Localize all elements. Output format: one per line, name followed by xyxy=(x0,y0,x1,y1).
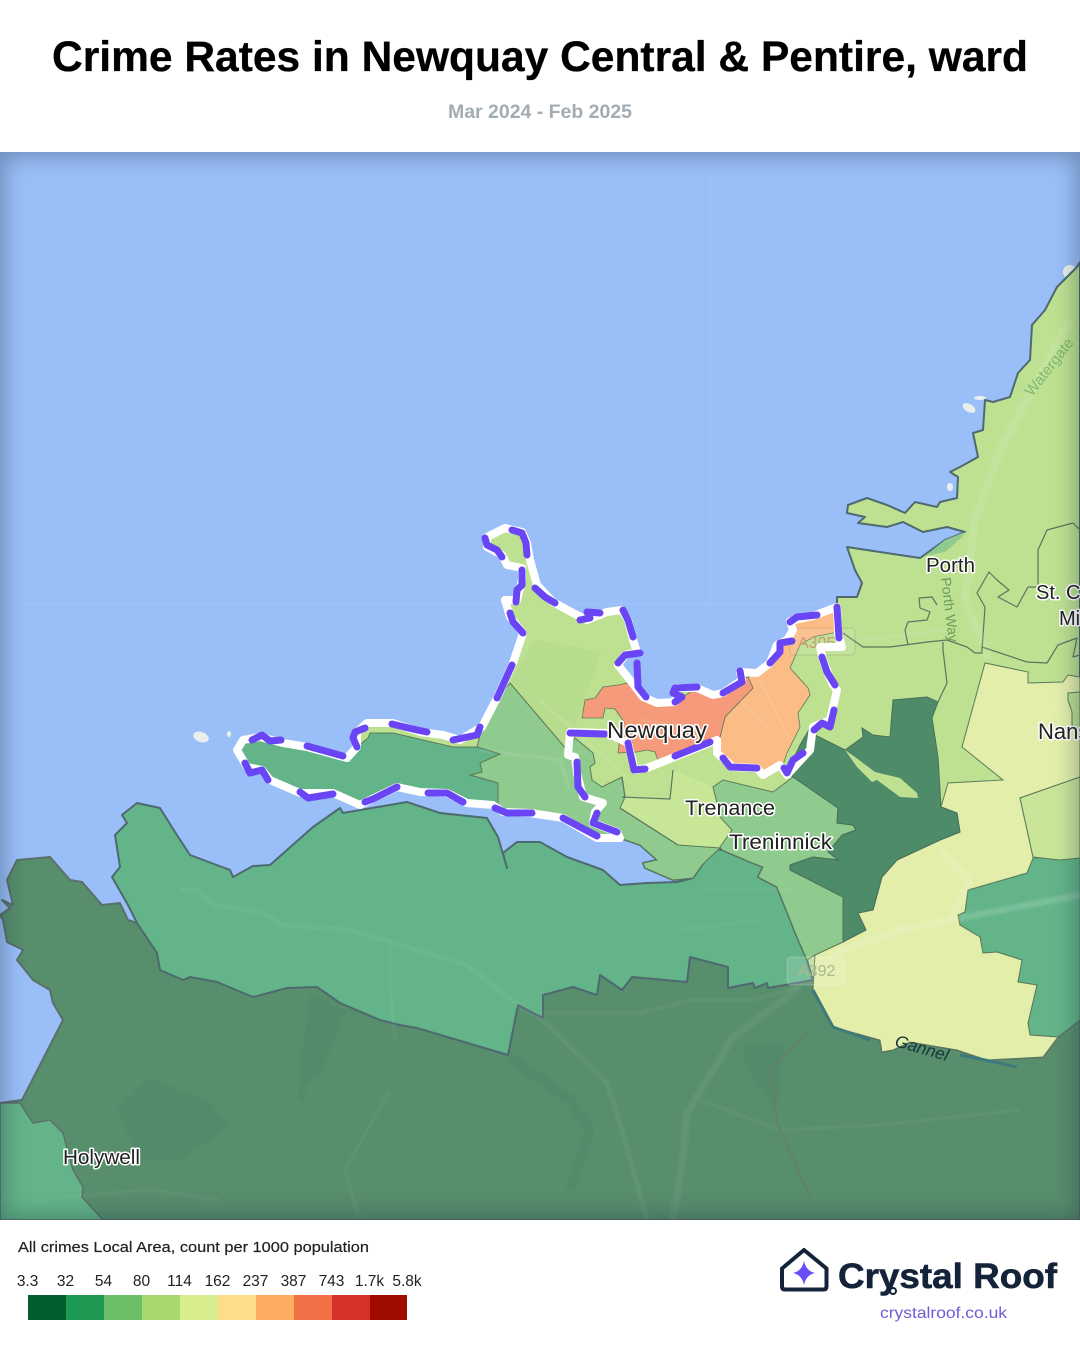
south green east xyxy=(958,858,1080,1037)
website: crystalroof.co.uk xyxy=(880,1305,1008,1322)
land base xyxy=(237,262,1080,1220)
pentire green area xyxy=(237,733,500,805)
legend xyxy=(17,1239,422,1320)
icon: house with star xyxy=(782,1250,826,1290)
road sign A392 xyxy=(787,957,845,985)
porth patch xyxy=(925,532,965,556)
south dark area xyxy=(0,857,1080,1220)
mid green west area xyxy=(470,683,720,880)
green notch right xyxy=(1068,692,1080,730)
ward white boundary xyxy=(237,528,842,838)
rocks xyxy=(192,265,1077,744)
trenance tint xyxy=(620,770,732,847)
river label Gannel: Gannel xyxy=(893,1032,952,1065)
river xyxy=(300,990,1017,1197)
legend labels: 1.7k xyxy=(355,1273,384,1290)
ward sub boundaries xyxy=(620,523,1080,845)
logo xyxy=(780,1248,1058,1322)
road label Watergate: Watergate xyxy=(1022,335,1077,399)
map edge vignette xyxy=(0,152,1080,1220)
light lens in dark area xyxy=(845,750,918,798)
place labels xyxy=(63,555,1080,1169)
legend labels: 5.8k xyxy=(392,1273,422,1290)
sea pocket xyxy=(621,659,635,675)
forest patches xyxy=(117,995,785,1160)
place labels: Newquay xyxy=(607,717,708,743)
legend labels: 3.3 xyxy=(17,1273,38,1290)
place labels: Treninnick xyxy=(729,831,833,854)
legend labels: 237 xyxy=(243,1273,268,1290)
place labels: Trenance xyxy=(685,797,775,820)
brand name: Crystal Roof xyxy=(838,1257,1057,1296)
legend labels: 114 xyxy=(167,1273,192,1290)
legend labels: 162 xyxy=(205,1273,230,1290)
legend labels: 387 xyxy=(281,1273,306,1290)
road sign A305: A305 xyxy=(798,635,835,652)
place labels: Holywell xyxy=(63,1147,140,1169)
header xyxy=(52,33,1028,123)
treninnick area xyxy=(713,777,856,960)
roads xyxy=(30,320,1080,1220)
legend labels: 80 xyxy=(133,1273,150,1290)
red area xyxy=(582,677,753,760)
legend labels: 743 xyxy=(319,1273,344,1290)
legend labels: 32 xyxy=(57,1273,74,1290)
ward purple dashes xyxy=(245,530,839,836)
headland tint xyxy=(510,640,601,750)
sea xyxy=(0,152,1080,1220)
road sign A305 xyxy=(790,628,855,655)
south green corner xyxy=(0,1103,103,1220)
east dark green area xyxy=(787,697,960,942)
legend labels: 54 xyxy=(95,1273,112,1290)
legend colour scale xyxy=(28,1295,407,1320)
place labels: Porth xyxy=(926,555,975,577)
title: Crime Rates in Newquay Central & Pentire, ward xyxy=(52,33,1028,81)
road sign A392: A392 xyxy=(798,963,835,980)
green patch right xyxy=(1020,777,1080,860)
orange area xyxy=(717,608,838,775)
subtitle: Mar 2024 - Feb 2025 xyxy=(448,102,632,123)
legend labels xyxy=(17,1273,422,1290)
road label Porth Way: Porth Way xyxy=(938,576,962,643)
south green west xyxy=(112,802,813,1055)
pale yellow area xyxy=(813,663,1080,1060)
legend title: All crimes Local Area, count per 1000 population xyxy=(18,1239,369,1256)
map xyxy=(0,152,1080,1220)
